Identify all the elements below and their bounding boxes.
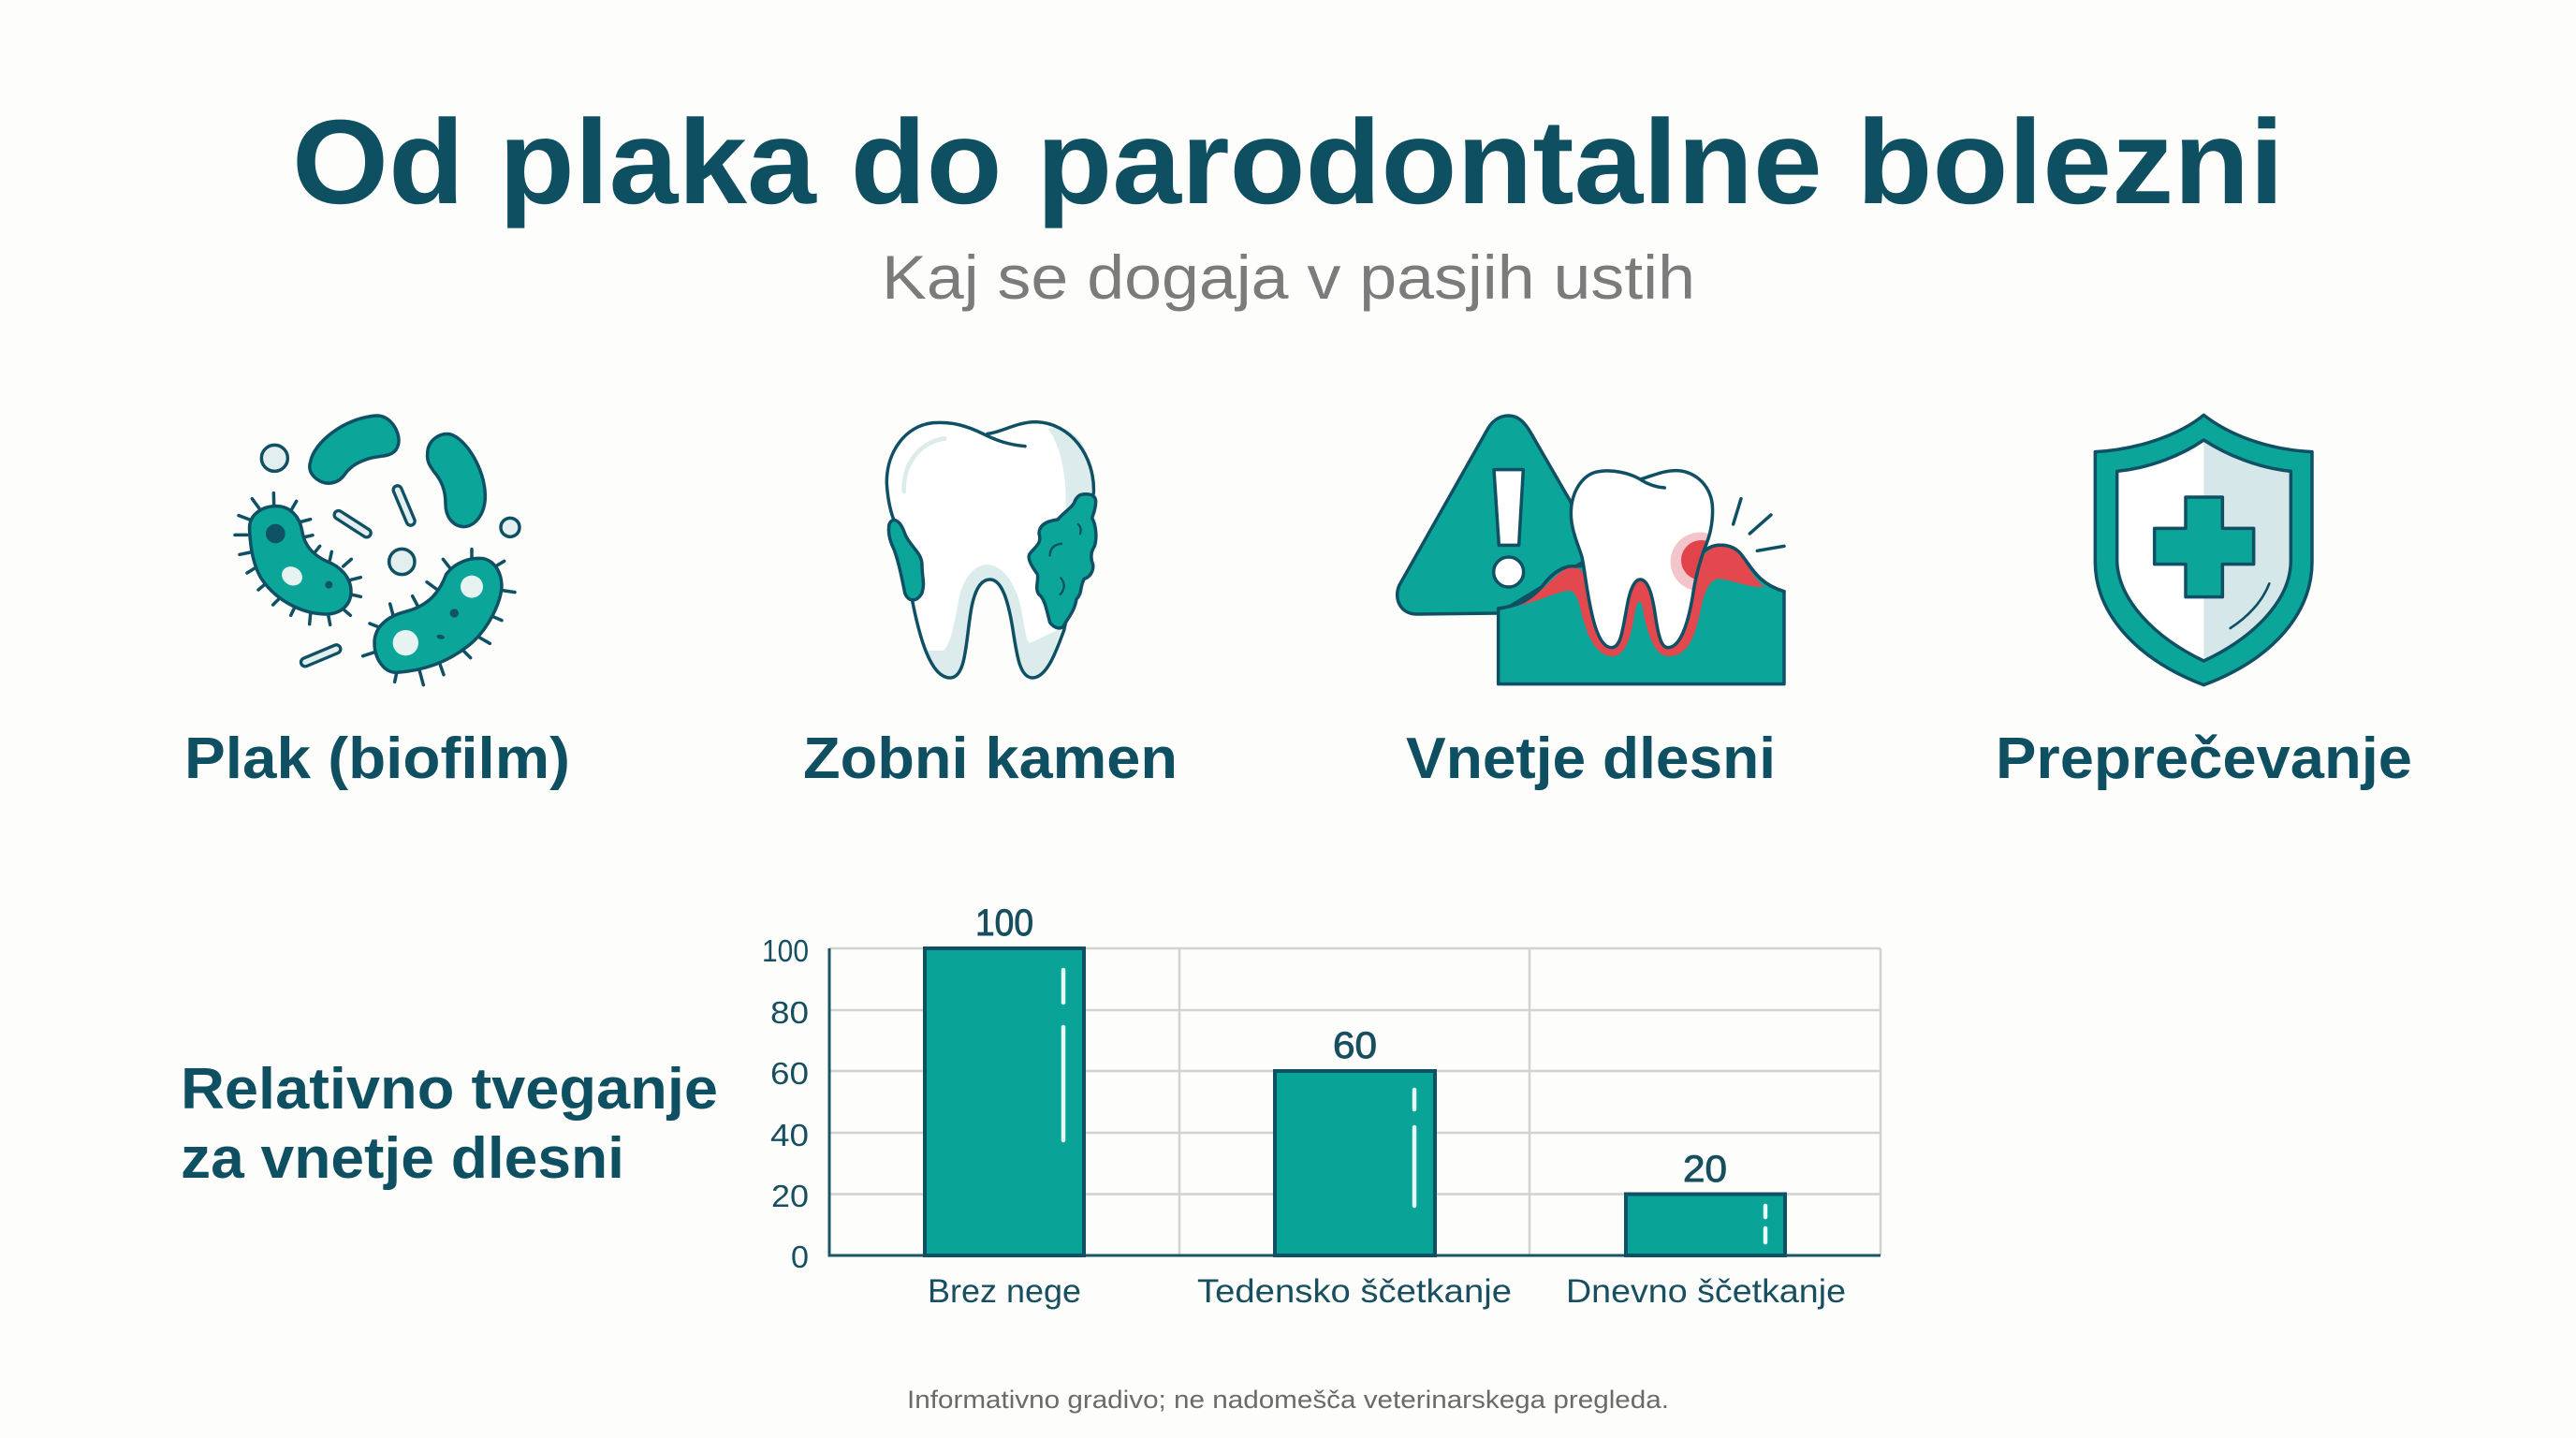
icon: shield with cross bbox=[2095, 415, 2312, 685]
bar: dnevno ščetkanje bbox=[1626, 1149, 1785, 1255]
label: vnetje dlesni: Vnetje dlesni bbox=[1406, 726, 1776, 791]
tooth outline bbox=[1571, 471, 1713, 648]
cross bbox=[2155, 497, 2254, 597]
y axis labels: 60 bbox=[770, 1056, 809, 1091]
pain lines bbox=[1734, 499, 1784, 550]
chart heading: za vnetje dlesni bbox=[181, 1126, 624, 1191]
exclamation mark bbox=[1494, 470, 1524, 587]
title: Od plaka do parodontalne bolezni bbox=[292, 95, 2284, 229]
bar: brez nege bbox=[925, 902, 1084, 1255]
label: plak: Plak (biofilm) bbox=[184, 726, 570, 791]
left bacterium bbox=[235, 493, 360, 624]
tooth outline bbox=[886, 422, 1093, 678]
tooth shading bbox=[927, 427, 1091, 677]
x axis labels: Brez nege bbox=[928, 1273, 1081, 1310]
y axis labels: 40 bbox=[770, 1118, 809, 1152]
icon: gum inflammation warning bbox=[1398, 416, 1784, 684]
chart heading bbox=[181, 1057, 718, 1191]
tooth highlight bbox=[904, 438, 944, 492]
x axis labels: Tedensko ščetkanje bbox=[1197, 1273, 1512, 1310]
right tartar bbox=[1029, 494, 1096, 628]
y axis labels: 80 bbox=[770, 995, 809, 1030]
tooth body bbox=[886, 422, 1093, 678]
left tartar bbox=[888, 521, 923, 600]
bar: dnevno ščetkanje: 20 bbox=[1683, 1149, 1727, 1190]
inflamed gum bbox=[1518, 546, 1764, 656]
y axis labels bbox=[762, 933, 809, 1274]
gum block bbox=[1499, 545, 1784, 684]
y axis labels: 20 bbox=[771, 1179, 809, 1213]
x axis labels bbox=[928, 1273, 1846, 1310]
label: preprečevanje: Preprečevanje bbox=[1996, 726, 2412, 791]
top bacillus bbox=[310, 416, 399, 483]
subtitle: Kaj se dogaja v pasjih ustih bbox=[882, 242, 1695, 312]
y axis labels: 100 bbox=[762, 933, 809, 968]
icon: tooth with tartar bbox=[886, 422, 1096, 678]
label: zobni kamen: Zobni kamen bbox=[803, 726, 1178, 791]
y axis labels: 0 bbox=[791, 1240, 809, 1274]
bar chart bbox=[762, 902, 1881, 1310]
tartar texture bbox=[1050, 524, 1081, 594]
bar: tedensko ščetkanje bbox=[1275, 1025, 1435, 1255]
tooth bbox=[1571, 471, 1713, 648]
bar: brez nege: 100 bbox=[975, 902, 1033, 944]
right bacterium bbox=[363, 550, 515, 685]
chart heading: Relativno tveganje bbox=[181, 1057, 718, 1122]
right bacillus bbox=[428, 434, 485, 527]
small rods bbox=[305, 490, 411, 662]
footer note: Informativno gradivo; ne nadomešča veterinarskega pregleda. bbox=[907, 1386, 1669, 1414]
shield rim bbox=[2095, 415, 2312, 685]
bar: tedensko ščetkanje: 60 bbox=[1333, 1025, 1377, 1066]
spores bbox=[261, 445, 520, 575]
gloss arc bbox=[2231, 583, 2269, 628]
shield inner bbox=[2117, 440, 2291, 661]
inflammation glow bbox=[1670, 532, 1708, 590]
icon: bacteria plaque bbox=[235, 416, 520, 685]
x axis labels: Dnevno ščetkanje bbox=[1566, 1273, 1846, 1310]
warning triangle bbox=[1398, 416, 1584, 614]
